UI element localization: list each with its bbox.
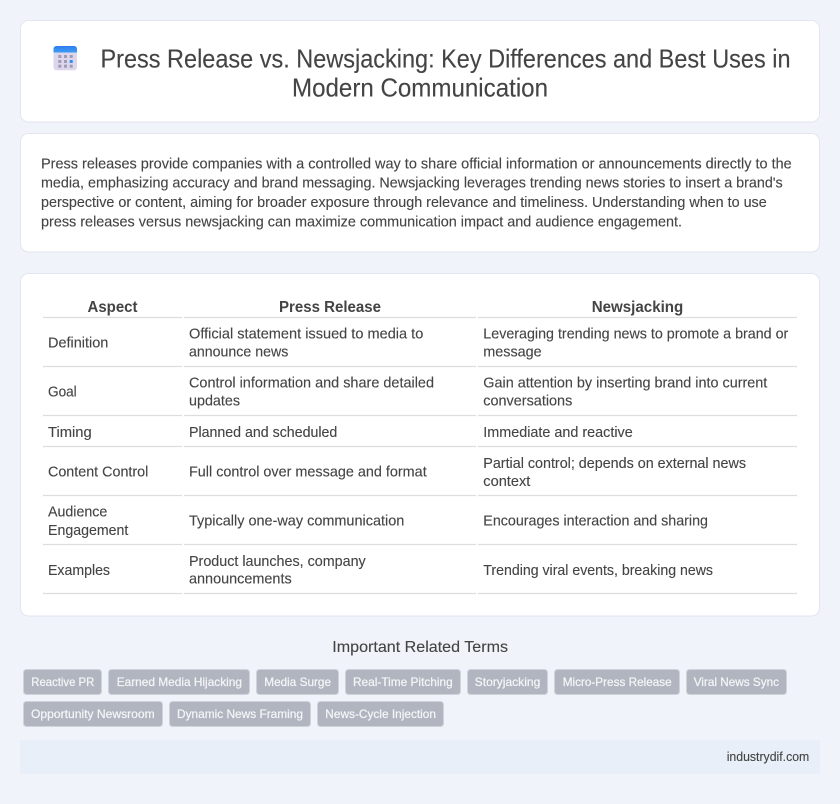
tag: Real-Time Pitching <box>346 670 460 694</box>
table row: Examples: Product launches, company <box>189 554 366 570</box>
table row: Goal: Goal <box>48 385 77 401</box>
table row: Audience Engagement: Audience <box>48 505 107 521</box>
table row: Content Control: Content Control <box>48 465 148 481</box>
table header row: Newsjacking <box>592 299 683 316</box>
table row: Content Control: Full control over message and format <box>189 465 427 481</box>
tag: News-Cycle Injection <box>318 702 444 726</box>
tag: Reactive PR <box>24 670 102 694</box>
table row: Examples <box>43 554 797 594</box>
text block: intro paragraph: perspective or content, aiming for broader exposure through relevance and timeliness. Understanding when to use <box>41 195 767 211</box>
tag: Dynamic News Framing: Dynamic News Framing <box>177 707 303 721</box>
table row: Timing <box>43 425 797 446</box>
icon: calendar <box>54 46 77 70</box>
table row: Audience Engagement: Typically one-way communication <box>189 514 404 530</box>
title: Press Release vs. Newsjacking: Key Differences and Best Uses in <box>100 46 790 74</box>
heading: related terms: Important Related Terms <box>332 639 508 656</box>
table row: Goal: conversations <box>483 394 572 410</box>
panel: title header <box>20 20 820 122</box>
text block: intro paragraph <box>41 156 792 230</box>
table row: Goal: Gain attention by inserting brand into current <box>483 376 767 392</box>
footer source text: industrydif.com <box>727 749 809 764</box>
table row: Timing: Timing <box>48 425 92 441</box>
footer bar <box>20 740 820 774</box>
table row: Examples: Examples <box>48 563 110 579</box>
table row: Audience Engagement: Engagement <box>48 523 128 539</box>
tag: News-Cycle Injection: News-Cycle Injection <box>325 707 436 721</box>
panel: introduction <box>20 134 820 252</box>
table row: Timing: Planned and scheduled <box>189 425 337 441</box>
tag: Viral News Sync <box>686 670 786 694</box>
table row: Timing: Immediate and reactive <box>483 425 633 441</box>
related terms tags <box>24 670 786 726</box>
table row: Content Control: context <box>483 474 530 490</box>
table row: Examples: Trending viral events, breaking news <box>483 563 713 579</box>
tag: Real-Time Pitching: Real-Time Pitching <box>353 675 453 689</box>
panel: comparison table <box>20 274 820 616</box>
tag: Opportunity Newsroom: Opportunity Newsroom <box>31 707 155 721</box>
tag: Dynamic News Framing <box>170 702 310 726</box>
table row: Content Control: Partial control; depends on external news <box>483 456 746 472</box>
table row: Goal <box>43 376 797 416</box>
table row: Definition: Official statement issued to media to <box>189 327 423 343</box>
table row: Definition: Definition <box>48 336 108 352</box>
text block: intro paragraph: media, emphasizing accuracy and brand messaging. Newsjacking leverages trending news stories to insert a brand's <box>41 176 783 192</box>
tag: Earned Media Hijacking: Earned Media Hijacking <box>117 675 242 689</box>
table row: Audience Engagement <box>43 505 797 544</box>
tag: Opportunity Newsroom <box>24 702 162 726</box>
text block: intro paragraph: press releases versus newsjacking can maximize communication impact and audience engagement. <box>41 214 682 230</box>
tag: Viral News Sync: Viral News Sync <box>694 675 779 689</box>
table row: Audience Engagement: Encourages interaction and sharing <box>483 514 708 530</box>
text block: intro paragraph: Press releases provide companies with a controlled way to share official information or announcements directly to the <box>41 156 792 172</box>
table header row: Press Release <box>279 299 381 316</box>
table row: Definition <box>43 327 797 366</box>
table row: Definition: Leveraging trending news to promote a brand or <box>483 327 788 343</box>
table row: Definition: message <box>483 345 542 361</box>
tag: Storyjacking <box>468 670 548 694</box>
table row: Goal: updates <box>189 394 240 410</box>
table header row <box>43 299 797 318</box>
tag: Media Surge <box>256 670 338 694</box>
tag: Storyjacking: Storyjacking <box>475 675 540 689</box>
tag: Earned Media Hijacking <box>108 670 250 694</box>
table row: Examples: announcements <box>189 572 292 588</box>
tag: Micro-Press Release <box>554 670 680 694</box>
title: Modern Communication <box>292 74 548 102</box>
tag: Media Surge: Media Surge <box>264 675 331 689</box>
tag: Micro-Press Release: Micro-Press Release <box>563 675 672 689</box>
table header row: Aspect <box>88 299 138 316</box>
table row: Content Control <box>43 456 797 496</box>
tag: Reactive PR: Reactive PR <box>31 675 95 689</box>
table row: Goal: Control information and share detailed <box>189 376 434 392</box>
title <box>100 46 790 102</box>
table row: Definition: announce news <box>189 345 288 361</box>
